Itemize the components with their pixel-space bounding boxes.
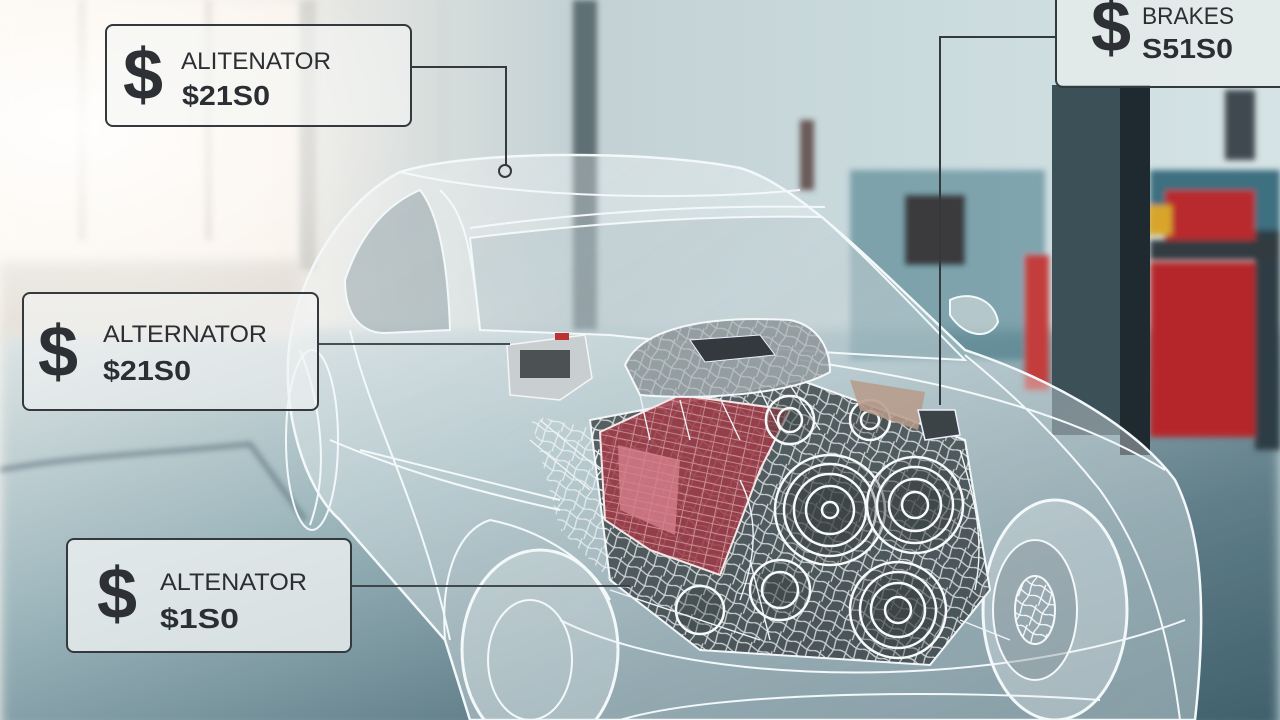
car body: transparent shell	[286, 155, 1201, 720]
callout: bottom-left alternator	[67, 539, 351, 652]
callout: bottom-left alternator: $1S0	[160, 603, 239, 634]
side window	[345, 190, 450, 333]
left frame wires	[530, 415, 610, 580]
callout: top-right brakes: BRAKES	[1142, 3, 1234, 30]
icon: dollar sign: $	[123, 35, 163, 115]
callout: top-left alternator: $21S0	[182, 80, 270, 111]
callout: top-left alternator: ALITENATOR	[181, 48, 331, 75]
callout: top-right brakes: S51S0	[1142, 33, 1233, 64]
rear wheel	[462, 550, 618, 720]
door lines	[300, 330, 560, 640]
callout: middle-left alternator	[23, 293, 318, 410]
icon: dollar sign: $	[38, 312, 78, 392]
car silhouette	[288, 155, 1201, 720]
connector lines	[318, 37, 1056, 586]
red battery block	[600, 395, 790, 575]
roof lines	[400, 172, 825, 330]
brake reservoir	[850, 380, 925, 430]
engine assembly	[507, 319, 1010, 665]
windshield	[470, 217, 965, 360]
callout: middle-left alternator: $21S0	[103, 355, 191, 386]
callout: top-right brakes	[1056, 0, 1280, 87]
pulleys	[676, 396, 963, 658]
bonnet	[560, 355, 1185, 720]
callout: bottom-left alternator: ALTENATOR	[160, 569, 307, 596]
fuse box	[507, 335, 592, 400]
mirror	[950, 296, 998, 334]
callout: top-left alternator	[106, 25, 411, 126]
top engine cover	[625, 319, 830, 397]
icon: dollar sign: $	[97, 554, 137, 634]
rear wheel arch	[286, 350, 338, 530]
engine block wireframe	[590, 380, 990, 665]
callout: middle-left alternator: ALTERNATOR	[103, 321, 267, 348]
front wheel	[983, 500, 1127, 720]
